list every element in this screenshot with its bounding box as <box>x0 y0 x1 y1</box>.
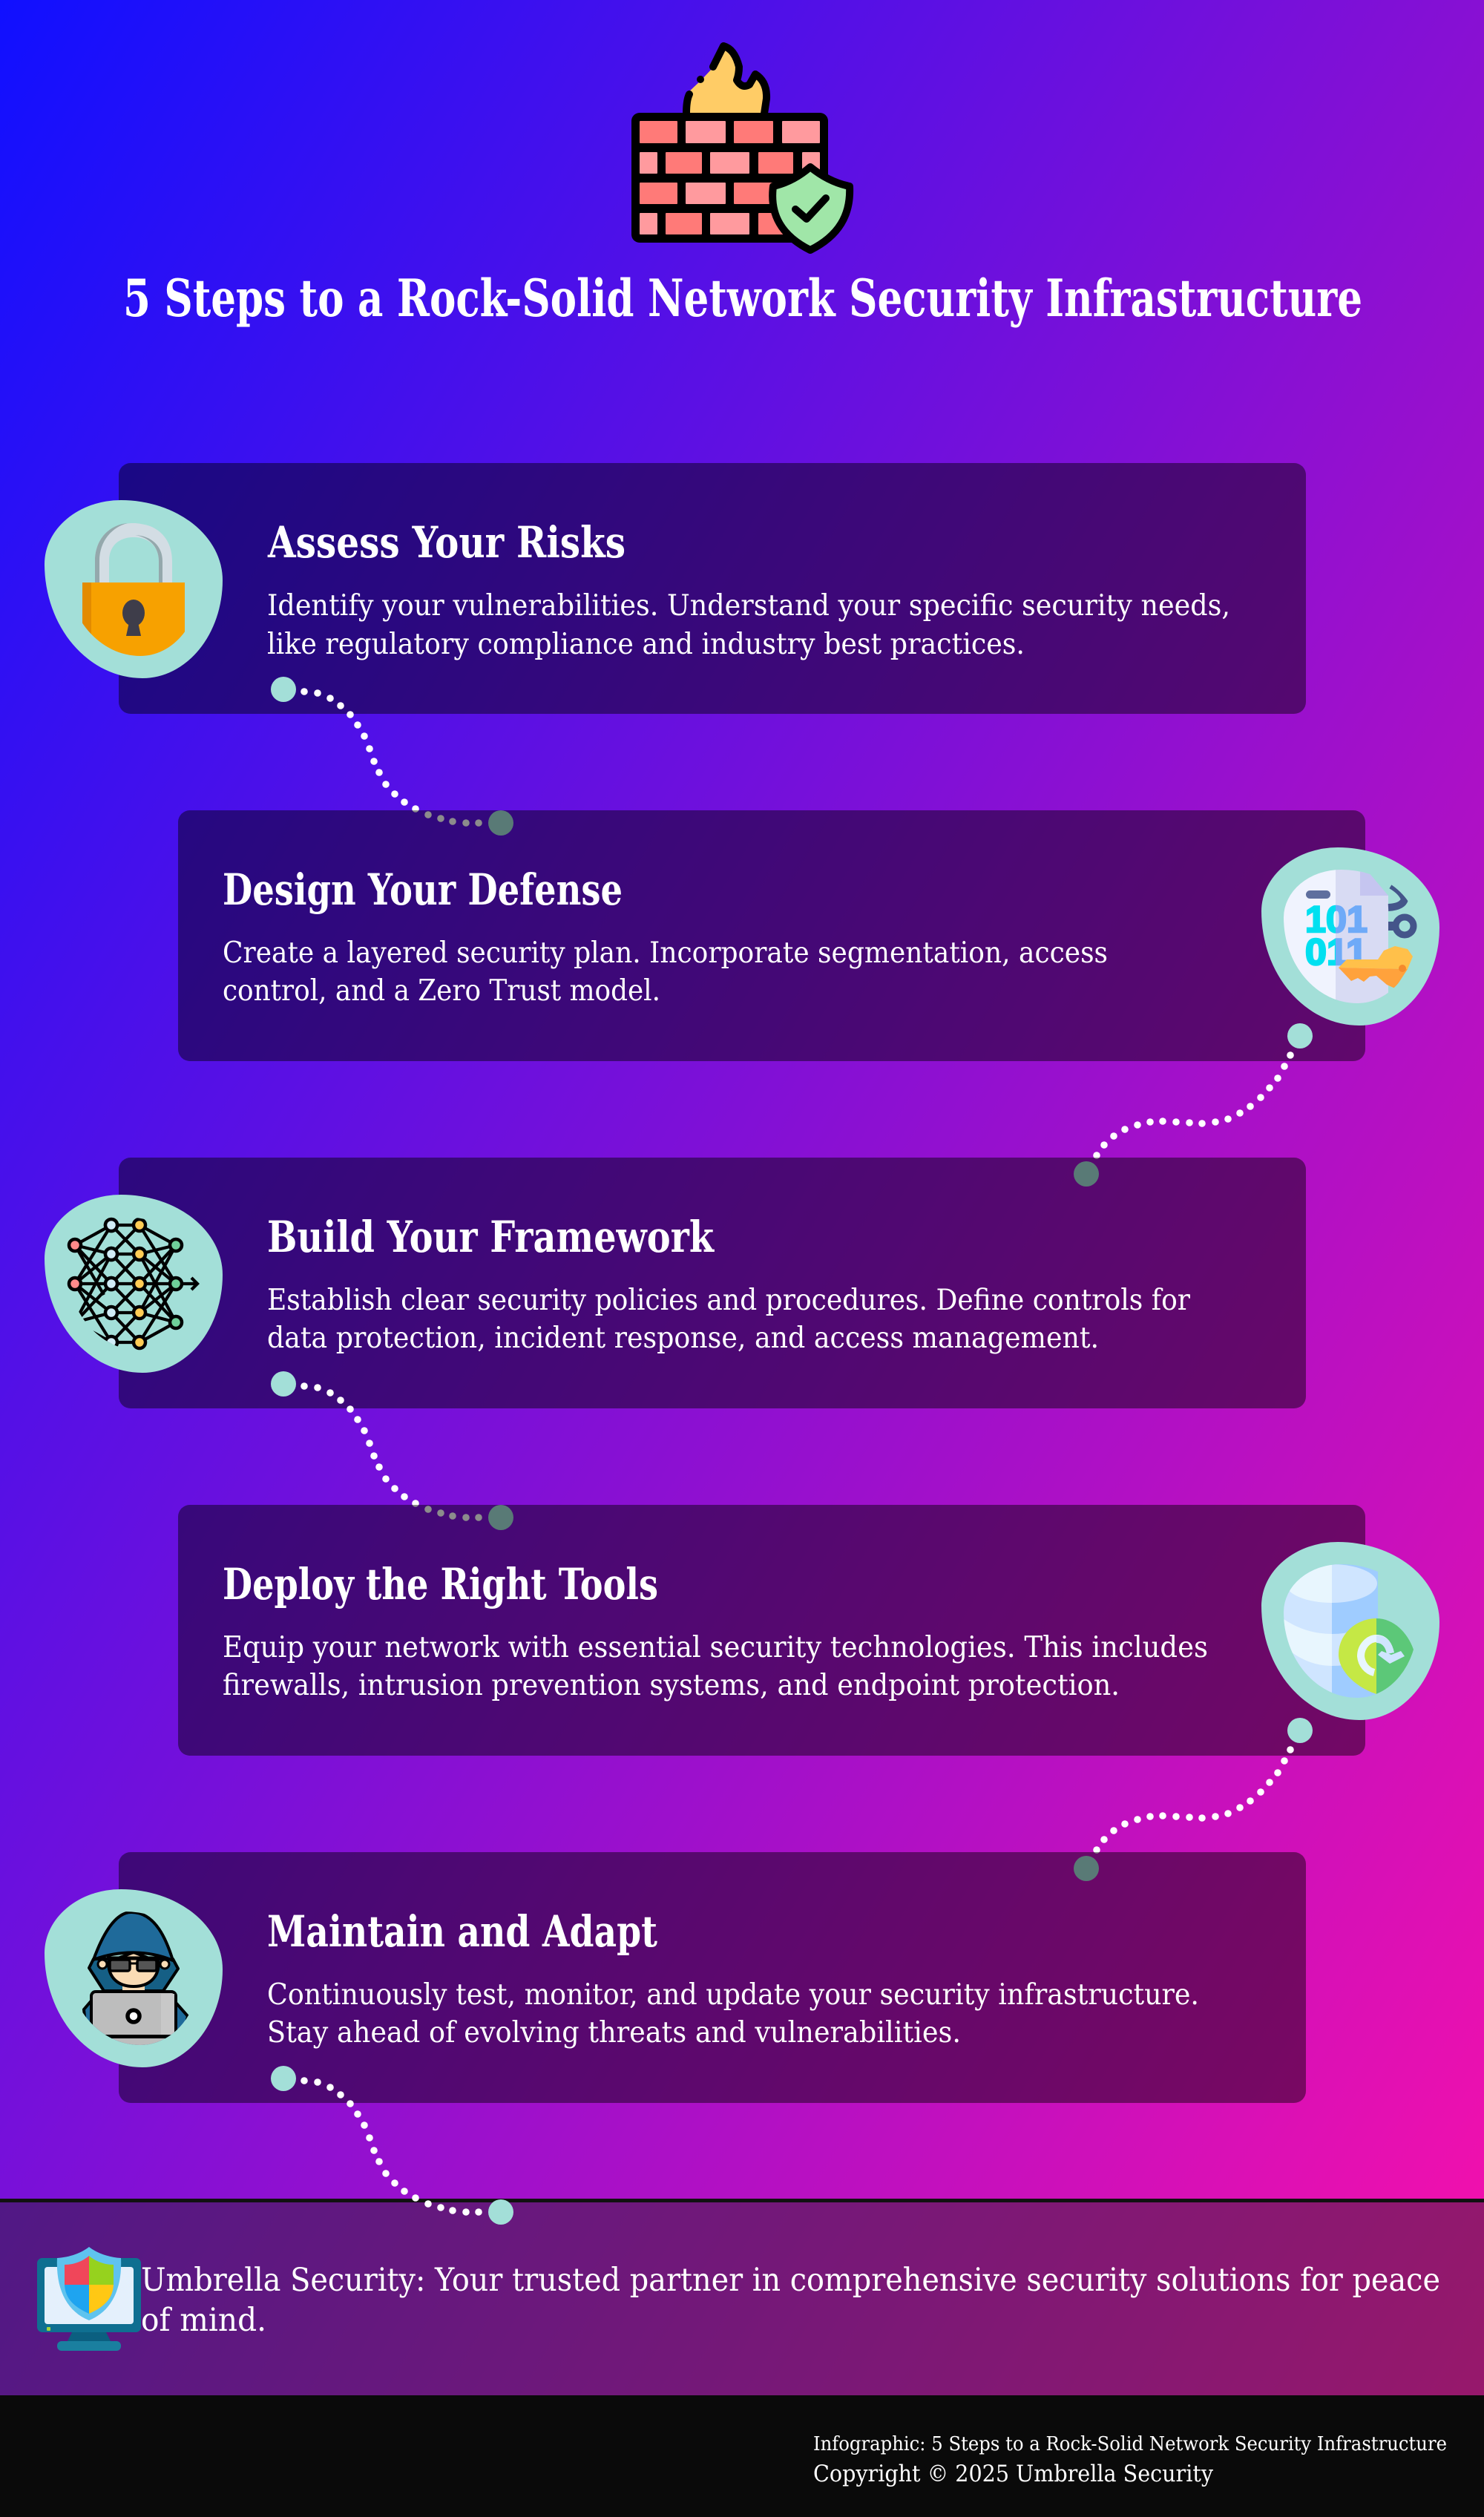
text: build your framework body: Establish clear security policies and procedures. Define controls for <box>267 1284 1190 1317</box>
text: deploy the right tools body: firewalls, intrusion prevention systems, and endpoint protection. <box>223 1669 1120 1702</box>
heading: build your framework: Build Your Framework <box>267 1212 715 1262</box>
text: assess your risks body <box>267 589 1230 661</box>
icon: monitor with shield <box>37 2247 141 2351</box>
text: deploy the right tools body: Equip your network with essential security technologies. This includes <box>223 1631 1208 1664</box>
panel: step 4 <box>178 1505 1365 1756</box>
text: design your defense body: control, and a Zero Trust model. <box>223 974 660 1008</box>
text: company statement <box>141 2262 1440 2339</box>
connector: step 2 to step 3 <box>1074 1023 1313 1187</box>
footer band: company statement <box>0 2199 1484 2395</box>
text: assess your risks body: Identify your vulnerabilities. Understand your specific security needs, <box>267 589 1230 623</box>
text: assess your risks body: like regulatory compliance and industry best practices. <box>267 628 1025 661</box>
icon: hooded hacker with laptop in blob <box>45 1889 223 2067</box>
panel: step 5 <box>119 1852 1306 2103</box>
panel: step 2 <box>178 810 1365 1061</box>
heading: design your defense: Design Your Defense <box>223 864 623 915</box>
heading: deploy the right tools: Deploy the Right Tools <box>223 1559 658 1609</box>
connector: step 4 to step 5 <box>1074 1718 1313 1881</box>
text: company statement: of mind. <box>141 2302 266 2339</box>
text: deploy the right tools body <box>223 1631 1208 1702</box>
text: build your framework body <box>267 1284 1190 1355</box>
text: build your framework body: data protection, incident response, and access management. <box>267 1322 1099 1355</box>
footer: copyright bar <box>0 2395 1484 2517</box>
icon: neural network in blob <box>45 1195 223 1373</box>
panel: step 1 <box>119 463 1306 714</box>
text: design your defense body: Create a layered security plan. Incorporate segmentation, access <box>223 936 1108 970</box>
text: design your defense body <box>223 936 1108 1008</box>
icon: binary document with key in blob: 101 <box>1305 899 1368 940</box>
panel: step 3 <box>119 1158 1306 1408</box>
text: maintain and adapt body <box>267 1978 1199 2050</box>
icon: binary document with key in blob <box>1261 847 1439 1025</box>
connector: step 3 to step 4 <box>271 1371 513 1530</box>
icon: binary document with key in blob: 011 <box>1305 931 1368 973</box>
text: infographic credit: Infographic: 5 Steps to a Rock-Solid Network Security Infrastructure <box>813 2433 1447 2455</box>
icon: padlock in blob <box>45 500 223 678</box>
icon: database with shield in blob <box>1261 1542 1439 1720</box>
icon: firewall with flame and shield <box>631 46 850 250</box>
text: maintain and adapt body: Stay ahead of evolving threats and vulnerabilities. <box>267 2016 961 2050</box>
heading: maintain and adapt: Maintain and Adapt <box>267 1906 657 1957</box>
connector: step 5 to footer band <box>271 2066 513 2225</box>
heading: assess your risks: Assess Your Risks <box>267 517 626 568</box>
text: maintain and adapt body: Continuously test, monitor, and update your security infrastructure. <box>267 1978 1199 2012</box>
connector: step 1 to step 2 <box>271 677 513 836</box>
text: copyright: Copyright © 2025 Umbrella Security <box>813 2461 1213 2487</box>
